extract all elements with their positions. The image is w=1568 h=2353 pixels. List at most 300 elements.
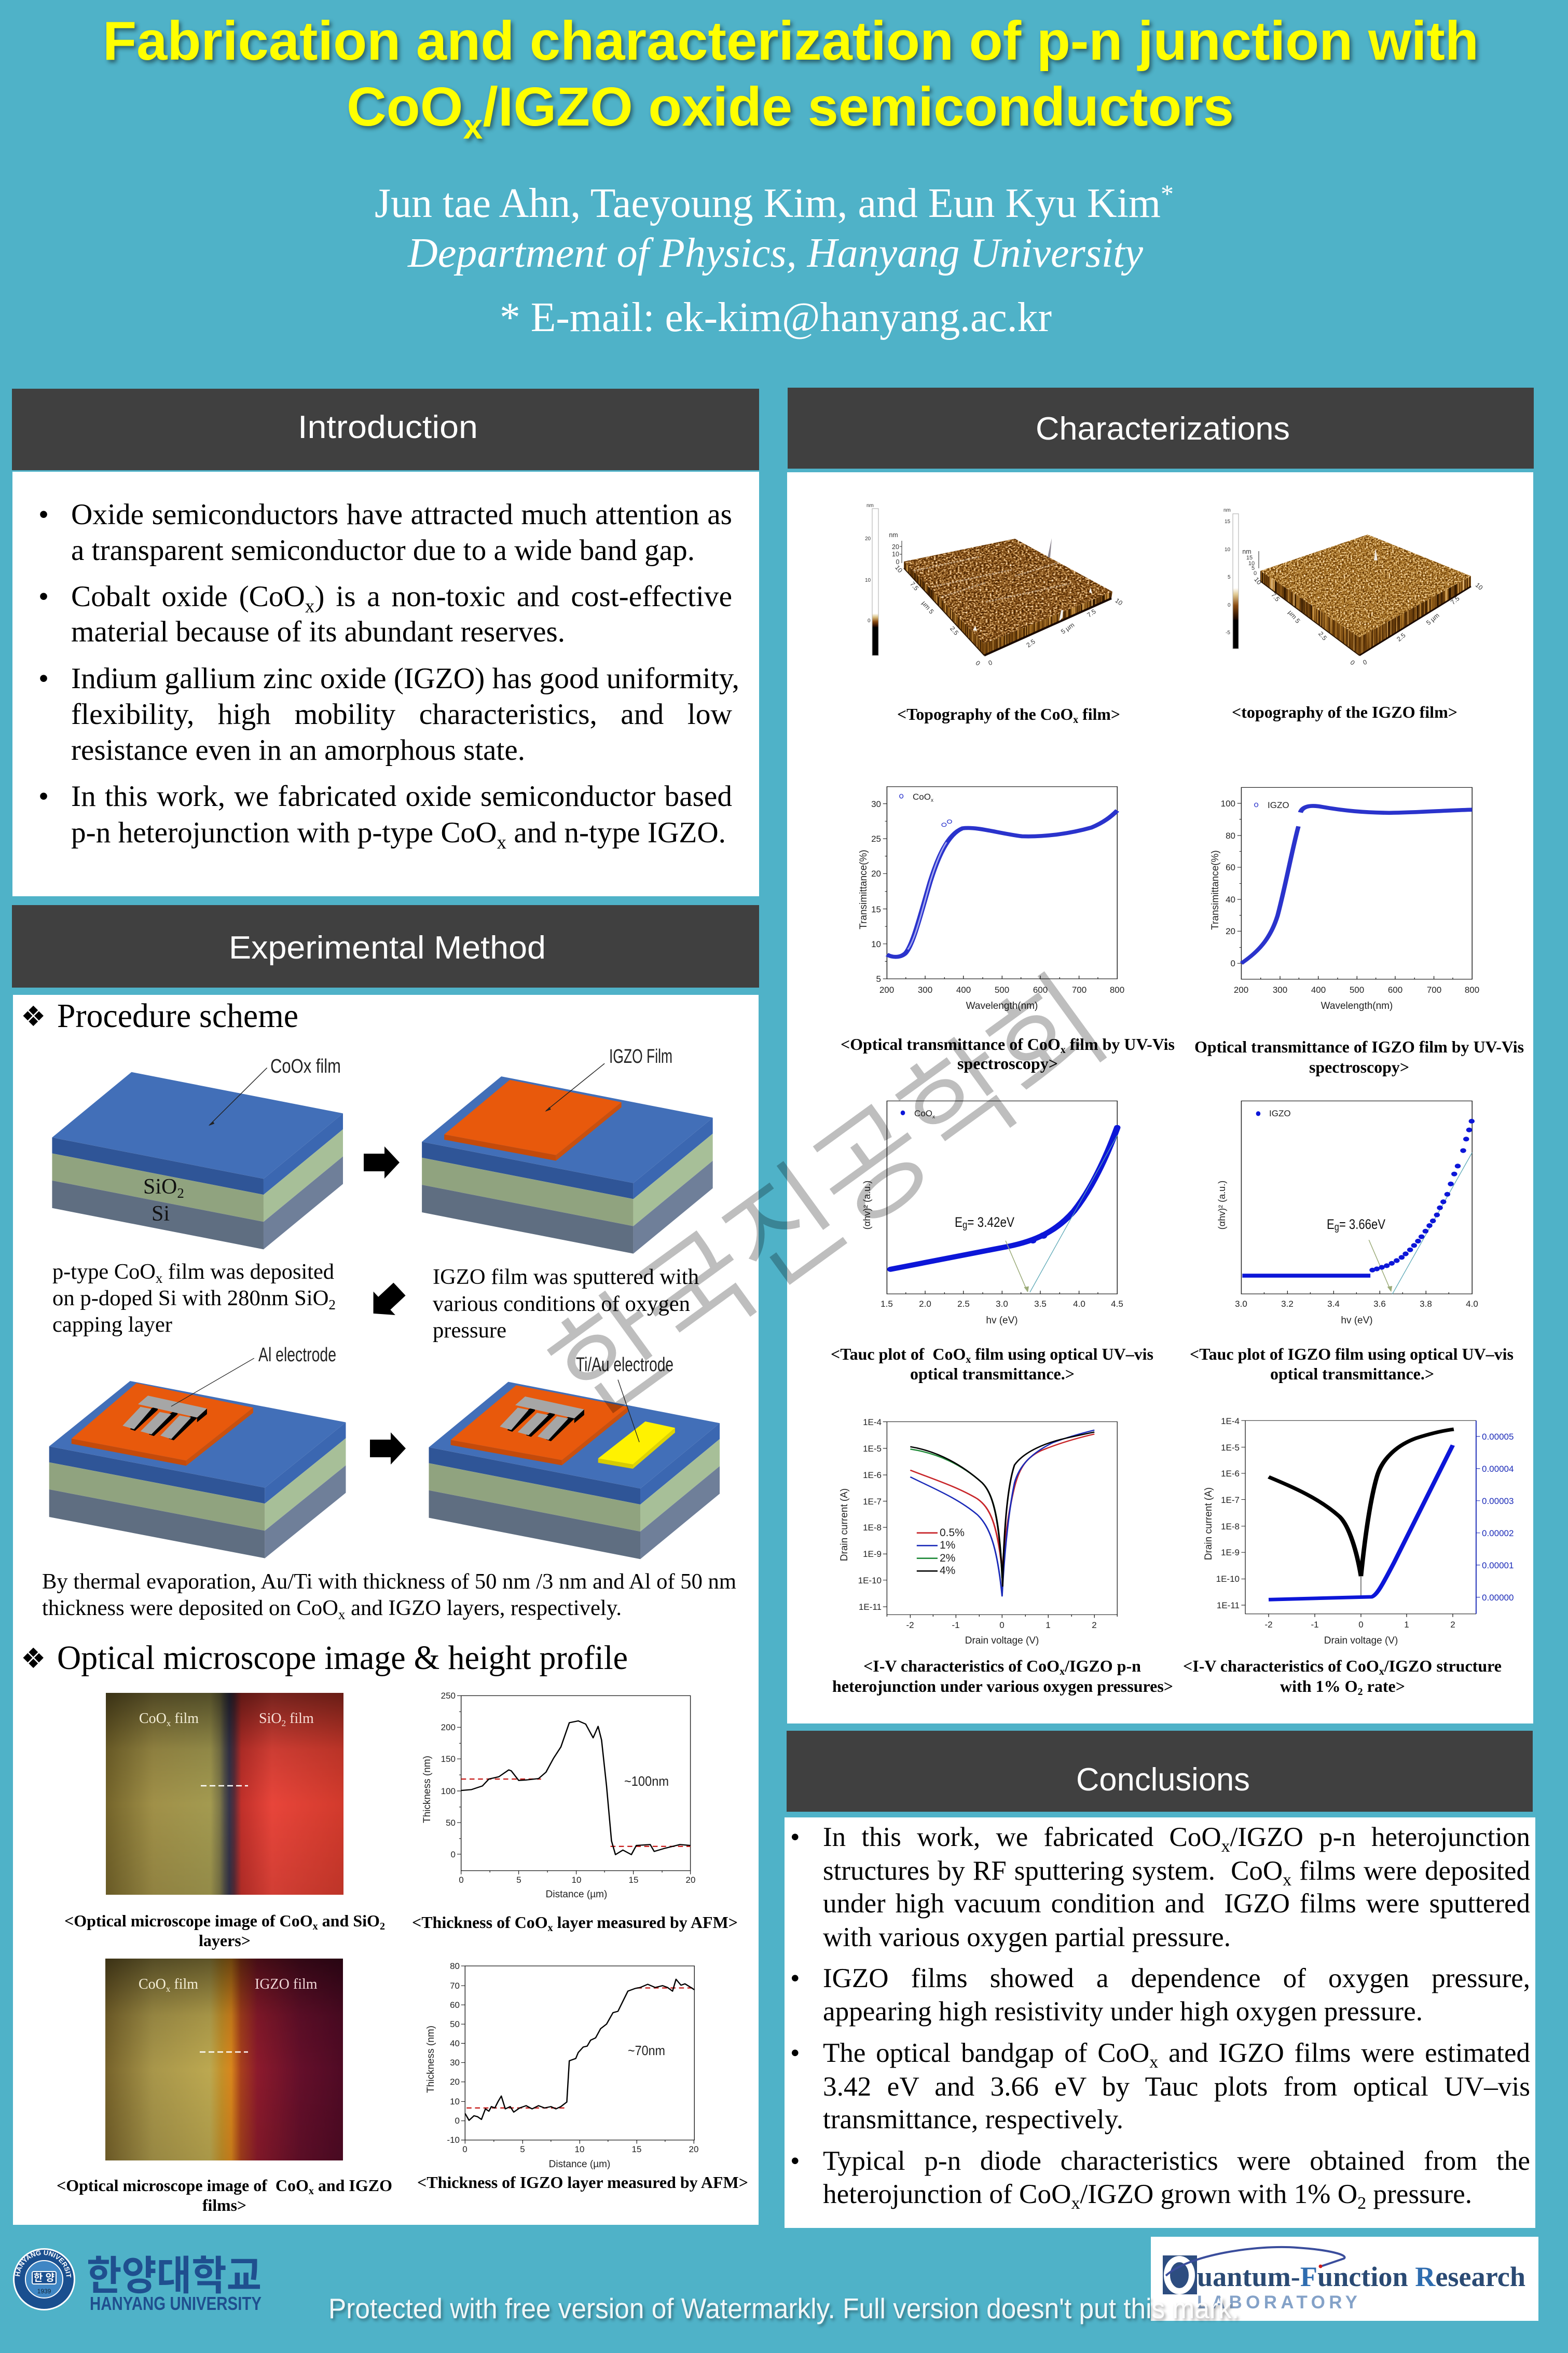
panel: conclusions: • — [790, 2038, 800, 2068]
image: IGZO AFM topography: -5 — [1226, 630, 1230, 636]
panel: introduction: p-n heterojunction with p-type CoO — [71, 816, 497, 849]
heading: procedure scheme: ❖ — [21, 1000, 46, 1033]
watermark: Watermarkly notice: Protected with free version of Watermarkly. Full version doesn't put this mark. — [328, 2292, 1239, 2324]
caption: CoOx deposition step: film was deposited — [162, 1260, 334, 1284]
panel: characterizations — [787, 388, 1534, 1723]
panel: conclusions: • — [790, 1963, 800, 1993]
panel: conclusions: transmittance, respectively. — [823, 2104, 1123, 2135]
panel: conclusions: 2 — [1357, 2194, 1366, 2213]
image: CoOx and IGZO microscope: film — [170, 1976, 198, 1992]
chart: CoOx thickness: 250 — [441, 1691, 456, 1701]
title: x — [463, 107, 483, 146]
image: IGZO AFM topography: 5 — [1228, 574, 1231, 580]
image: IGZO AFM topography: 7.5 — [1449, 595, 1461, 606]
panel: conclusions: x — [1221, 1837, 1230, 1856]
chart: I-V by oxygen pressure: 1E-6 — [863, 1470, 882, 1480]
image: CoOx and SiO2 microscope: film — [171, 1711, 199, 1727]
caption: microscope CoOx and SiO2: and SiO — [318, 1911, 380, 1930]
caption: topography CoOx: film> — [1078, 705, 1120, 723]
arrow: step 1 to step 2 — [364, 1146, 400, 1179]
chart: IGZO Tauc plot: IGZO — [1269, 1109, 1291, 1118]
panel: conclusions: films were deposited — [1291, 1856, 1530, 1886]
panel: conclusions: The optical bandgap of CoO — [823, 2038, 1150, 2068]
diagram: IGZO film device: IGZO Film — [609, 1046, 672, 1068]
caption: Tauc IGZO: <Tauc plot of IGZO film using optical UV–vis — [1190, 1345, 1514, 1363]
diagram: CoOx film device: 2 — [177, 1185, 184, 1201]
panel: introduction: a transparent semiconductor due to a wide band gap. — [71, 534, 695, 567]
chart: IGZO thickness: 15 — [632, 2144, 641, 2154]
chart: CoOx Tauc plot: 2.5 — [957, 1299, 970, 1309]
chart: CoOx transmittance: 500 — [995, 985, 1009, 995]
chart: CoOx thickness: 100 — [441, 1786, 456, 1796]
caption: transmittance CoOx: x — [1061, 1044, 1066, 1056]
image: CoOx and IGZO microscope: CoO — [139, 1976, 166, 1992]
image: CoOx and IGZO microscope — [105, 1959, 343, 2160]
panel: conclusions: /IGZO grown with 1% O — [1080, 2179, 1357, 2209]
chart: I-V at 1% O2: 2 — [1450, 1620, 1455, 1630]
caption: microscope CoOx and SiO2 — [64, 1911, 385, 1950]
caption: CoOx deposition step: capping layer — [52, 1312, 172, 1337]
chart: IGZO thickness: 20 — [450, 2077, 460, 2087]
diagram: IGZO film device — [422, 1046, 713, 1254]
chart: CoOx Tauc plot: 3.5 — [1034, 1299, 1047, 1309]
panel: conclusions: /IGZO p-n heterojunction — [1230, 1822, 1530, 1852]
chart: CoOx transmittance: 25 — [871, 834, 881, 844]
chart: IGZO thickness: 10 — [450, 2097, 460, 2106]
chart: I-V by oxygen pressure: 1E-10 — [858, 1576, 882, 1585]
panel: conclusions: under high vacuum condition and IGZO films were sputtered — [823, 1889, 1530, 1919]
chart: CoOx thickness: 15 — [629, 1875, 638, 1885]
image: CoOx AFM topography: 7.5 — [909, 580, 920, 592]
arrow: step 3 to step 4 — [370, 1432, 406, 1465]
chart: IGZO Tauc plot: 3.2 — [1281, 1299, 1294, 1309]
chart: IGZO thickness: 0 — [455, 2116, 460, 2126]
image: CoOx and SiO2 microscope: film — [286, 1711, 314, 1727]
caption: electrode evaporation: thickness were deposited on CoO — [42, 1596, 337, 1620]
chart: CoOx thickness — [422, 1691, 695, 1900]
diagram: Al electrode device: Al electrode — [258, 1344, 336, 1366]
logo: Quantum-Function Research Laboratory: uantum-Function Research — [1197, 2261, 1525, 2292]
diagram: CoOx film device: CoOx film — [270, 1056, 341, 1077]
chart: CoOx Tauc plot: hv (eV) — [986, 1315, 1018, 1326]
image: CoOx AFM topography — [865, 503, 1124, 667]
chart: I-V at 1% O2: 0.00001 — [1482, 1561, 1514, 1570]
image: CoOx and SiO2 microscope: x — [167, 1718, 171, 1728]
caption: microscope CoOx and IGZO — [57, 2176, 392, 2214]
image: CoOx AFM topography: 20 — [865, 536, 871, 542]
caption: electrode evaporation: and IGZO layers, respectively. — [345, 1596, 622, 1620]
chart: IGZO thickness: 50 — [450, 2019, 460, 2029]
caption: microscope CoOx and IGZO: and IGZO — [314, 2176, 392, 2195]
logo: Hanyang University — [13, 2248, 262, 2314]
panel: conclusions: x — [1149, 2053, 1158, 2072]
panel: introduction: Introduction — [298, 409, 478, 445]
image: IGZO AFM topography: 10 — [1253, 576, 1263, 586]
image: CoOx AFM topography: 5 µm — [1060, 621, 1076, 636]
heading: optical microscope: ❖ — [21, 1642, 46, 1675]
chart: CoOx Tauc plot: (αhv)² (a.u.) — [862, 1181, 872, 1229]
chart: CoOx transmittance: Transimittance(%) — [858, 850, 869, 929]
chart: IGZO Tauc plot — [1217, 1101, 1478, 1326]
chart: I-V at 1% O2: -2 — [1264, 1620, 1273, 1630]
panel: conclusions: Conclusions — [1076, 1762, 1250, 1798]
chart: IGZO transmittance: 300 — [1273, 985, 1287, 995]
panel: conclusions: Typical p-n diode characteristics were obtained from the — [823, 2146, 1530, 2176]
image: CoOx AFM topography: 20 — [892, 543, 899, 551]
chart: CoOx thickness: 200 — [441, 1722, 456, 1732]
chart: CoOx thickness: Distance (µm) — [546, 1889, 607, 1900]
image: IGZO AFM topography: 5 — [1251, 565, 1255, 571]
image: CoOx AFM topography: 2.5 — [948, 625, 960, 637]
caption: topography IGZO: <topography of the IGZO film> — [1232, 703, 1457, 721]
chart: CoOx thickness: ~100nm — [624, 1773, 669, 1789]
panel: introduction: • — [38, 780, 49, 813]
caption: transmittance IGZO — [1194, 1037, 1524, 1076]
authors and affiliation: Department of Physics, Hanyang University — [407, 230, 1143, 276]
diagram: Ti/Au electrode device: Ti/Au electrode — [576, 1354, 673, 1376]
caption: Tauc CoOx — [831, 1345, 1153, 1383]
caption: I-V 1% O2: with 1% O — [1280, 1677, 1357, 1695]
chart: IGZO transmittance: 400 — [1311, 985, 1326, 995]
caption: I-V 1% O2: <I-V characteristics of CoO — [1183, 1657, 1379, 1675]
chart: I-V at 1% O2: 1E-4 — [1221, 1416, 1240, 1426]
image: CoOx and SiO2 microscope: SiO — [259, 1711, 282, 1727]
panel: experimental method: Experimental Method — [229, 930, 546, 966]
panel: introduction: • — [38, 662, 49, 695]
image: IGZO AFM topography: 0 — [1228, 603, 1231, 608]
chart: IGZO Tauc plot: hv (eV) — [1341, 1315, 1373, 1326]
chart: CoOx Tauc plot: = 3.42eV — [967, 1214, 1014, 1230]
caption: microscope CoOx and SiO2: <Optical microscope image of CoO — [64, 1911, 312, 1930]
caption: thickness of IGZO: <Thickness of IGZO layer measured by AFM> — [417, 2173, 748, 2192]
caption: I-V pressures: x — [1060, 1666, 1065, 1677]
chart: IGZO thickness: 0 — [462, 2144, 467, 2154]
caption: topography CoOx: <Topography of the CoO — [897, 705, 1075, 723]
panel: conclusions: with various oxygen partial pressure. — [823, 1922, 1231, 1952]
panel: conclusions: structures by RF sputtering system. CoO — [823, 1856, 1283, 1886]
panel: conclusions: • — [790, 2146, 800, 2176]
diagram: Al electrode device — [49, 1344, 346, 1558]
chart: I-V by oxygen pressure: -2 — [906, 1620, 914, 1630]
chart: IGZO thickness: Thickness (nm) — [425, 2026, 436, 2093]
caption: transmittance IGZO: spectroscopy> — [1309, 1058, 1409, 1076]
caption: electrode evaporation: x — [338, 1607, 346, 1622]
image: CoOx and SiO2 microscope: 2 — [282, 1718, 286, 1728]
panel: characterizations: Characterizations — [1036, 411, 1290, 447]
panel: introduction: x — [305, 596, 315, 617]
chart: I-V at 1% O2: 0.00000 — [1482, 1593, 1514, 1603]
chart: CoOx transmittance: 5 — [876, 974, 881, 984]
caption: electrode evaporation: By thermal evaporation, Au/Ti with thickness of 50 nm /3 nm and Al of 50 nm — [42, 1569, 736, 1594]
chart: IGZO thickness: 30 — [450, 2058, 460, 2068]
chart: I-V by oxygen pressure: 0.5% — [940, 1527, 965, 1539]
chart: IGZO transmittance: 800 — [1465, 985, 1479, 995]
image: IGZO AFM topography: 15 — [1225, 519, 1231, 525]
chart: IGZO transmittance: 500 — [1350, 985, 1364, 995]
caption: topography CoOx: x — [1073, 714, 1078, 726]
chart: IGZO transmittance: 100 — [1221, 799, 1235, 809]
panel: conclusions: IGZO films showed a dependence of oxygen pressure, — [823, 1963, 1530, 1993]
image: CoOx AFM topography: 0 — [987, 659, 993, 667]
chart: IGZO Tauc plot: 4.0 — [1466, 1299, 1478, 1309]
panel: introduction: material because of its abundant reserves. — [71, 615, 565, 648]
chart: CoOx transmittance: Wavelength(nm) — [966, 1001, 1038, 1011]
panel: conclusions: and IGZO films were estimated — [1158, 2038, 1530, 2068]
chart: IGZO Tauc plot: 3.0 — [1235, 1299, 1247, 1309]
panel: introduction: flexibility, high mobility characteristics, and low — [71, 698, 733, 731]
diagram: CoOx film device: Si — [152, 1202, 170, 1226]
panel: introduction: x — [497, 832, 507, 853]
caption: microscope CoOx and IGZO: films> — [202, 2196, 246, 2214]
image: IGZO AFM topography: 10 — [1474, 581, 1484, 592]
chart: IGZO thickness: ~70nm — [628, 2043, 665, 2058]
image: CoOx AFM topography: 10 — [893, 564, 904, 574]
chart: IGZO thickness: 10 — [575, 2144, 584, 2154]
chart: I-V by oxygen pressure: 0 — [999, 1620, 1005, 1630]
title: /IGZO oxide semiconductors — [483, 76, 1234, 138]
caption: Tauc IGZO — [1190, 1345, 1514, 1383]
caption: microscope CoOx and SiO2: layers> — [199, 1931, 251, 1950]
image: CoOx and SiO2 microscope — [106, 1693, 343, 1895]
chart: CoOx thickness: 20 — [686, 1875, 695, 1885]
caption: CoOx deposition step: on p-doped Si with 280nm SiO — [52, 1286, 327, 1310]
panel: introduction: Cobalt oxide (CoO — [71, 580, 305, 613]
caption: I-V 1% O2: rate> — [1363, 1677, 1405, 1695]
panel: introduction: resistance even in an amorphous state. — [71, 734, 525, 767]
chart: CoOx transmittance: 700 — [1072, 985, 1086, 995]
caption: I-V 1% O2: 2 — [1358, 1686, 1363, 1698]
chart: CoOx thickness: 150 — [441, 1754, 456, 1764]
image: CoOx and SiO2 microscope: CoO — [139, 1711, 167, 1727]
panel: introduction: • — [38, 580, 49, 613]
chart: CoOx Tauc plot — [862, 1101, 1123, 1326]
image: CoOx AFM topography: 10 — [865, 578, 871, 583]
panel: introduction: In this work, we fabricated oxide semiconductor based — [71, 780, 732, 813]
panel: conclusions: In this work, we fabricated CoO — [823, 1822, 1221, 1852]
chart: CoOx transmittance — [858, 787, 1124, 1011]
chart: IGZO thickness: 40 — [450, 2039, 460, 2048]
chart: IGZO Tauc plot: 3.6 — [1373, 1299, 1386, 1309]
chart: CoOx Tauc plot: E — [955, 1214, 964, 1230]
panel: introduction: Oxide semiconductors have attracted much attention as — [71, 498, 732, 531]
image: CoOx AFM topography: 2.5 — [1025, 638, 1037, 649]
logo: Hanyang University: 1939 — [37, 2288, 51, 2295]
panel: conclusions: appearing high resistivity under high oxygen pressure. — [823, 1996, 1423, 2027]
panel: introduction — [12, 389, 759, 896]
chart: I-V by oxygen pressure: -1 — [952, 1620, 960, 1630]
chart: IGZO transmittance: 0 — [1231, 959, 1235, 968]
caption: transmittance CoOx: film by UV-Vis — [1066, 1035, 1175, 1054]
panel: introduction: ) is a non-toxic and cost-effective — [314, 580, 732, 613]
chart: CoOx thickness: 0 — [459, 1875, 464, 1885]
caption: transmittance IGZO: Optical transmittance of IGZO film by UV-Vis — [1194, 1037, 1524, 1056]
chart: CoOx Tauc plot: 1.5 — [881, 1299, 893, 1309]
logo: Quantum-Function Research Laboratory: LABORATORY — [1197, 2292, 1357, 2313]
chart: CoOx transmittance: 200 — [879, 985, 894, 995]
caption: IGZO sputter step: IGZO film was sputtered with — [433, 1265, 699, 1289]
watermark: Korean society name: 한국진공학회 — [529, 954, 1130, 1441]
chart: CoOx transmittance: 20 — [871, 869, 881, 879]
chart: IGZO transmittance: 600 — [1388, 985, 1402, 995]
chart: IGZO thickness: -10 — [447, 2135, 460, 2145]
chart: IGZO transmittance: 700 — [1427, 985, 1441, 995]
chart: CoOx Tauc plot: 3.0 — [996, 1299, 1008, 1309]
logo: Hanyang University: 한 양 — [34, 2272, 54, 2283]
image: IGZO AFM topography: 2.5 — [1395, 632, 1407, 643]
chart: IGZO thickness: 5 — [520, 2144, 525, 2154]
image: IGZO AFM topography: nm — [1223, 508, 1231, 513]
chart: CoOx transmittance: 10 — [871, 939, 881, 949]
caption: IGZO sputter step: various conditions of oxygen — [433, 1292, 690, 1316]
arrow: step 2 to step 3 — [362, 1277, 410, 1325]
caption: microscope CoOx and SiO2: x — [313, 1921, 318, 1932]
chart: I-V by oxygen pressure: 1E-7 — [863, 1497, 882, 1507]
diagram: Ti/Au electrode device — [429, 1354, 720, 1559]
chart: I-V at 1% O2: 1E-11 — [1217, 1600, 1240, 1610]
chart: CoOx transmittance: 300 — [918, 985, 932, 995]
caption: Tauc CoOx: optical transmittance.> — [910, 1364, 1075, 1383]
image: IGZO AFM topography: 5 µm — [1425, 612, 1441, 626]
chart: IGZO thickness: 70 — [450, 1981, 460, 1991]
panel: conclusions: heterojunction of CoO — [823, 2179, 1070, 2209]
chart: I-V by oxygen pressure: Drain current (A) — [839, 1488, 850, 1561]
chart: CoOx transmittance: CoO — [913, 792, 931, 802]
caption: microscope CoOx and IGZO: <Optical microscope image of CoO — [57, 2176, 309, 2195]
chart: IGZO Tauc plot: = 3.66eV — [1339, 1216, 1385, 1232]
panel: introduction: • — [38, 498, 49, 531]
caption: CoOx deposition step: p-type CoO — [52, 1260, 156, 1284]
chart: I-V by oxygen pressure: 4% — [940, 1565, 955, 1577]
chart: IGZO thickness: Distance (µm) — [549, 2159, 610, 2170]
image: IGZO AFM topography: 7.5 — [1270, 591, 1281, 603]
chart: CoOx Tauc plot: 2.0 — [919, 1299, 931, 1309]
chart: CoOx Tauc plot: g — [962, 1220, 967, 1231]
chart: CoOx Tauc plot: 4.5 — [1111, 1299, 1123, 1309]
chart: IGZO transmittance: 40 — [1226, 895, 1235, 905]
chart: I-V at 1% O2: Drain voltage (V) — [1324, 1635, 1398, 1646]
chart: IGZO transmittance: 20 — [1226, 926, 1235, 936]
caption: microscope CoOx and SiO2: 2 — [380, 1921, 385, 1932]
chart: CoOx transmittance: 15 — [871, 905, 881, 914]
image: IGZO AFM topography: 0 — [1254, 570, 1257, 577]
image: CoOx AFM topography: 0 — [974, 659, 982, 667]
panel: experimental method — [12, 905, 759, 2225]
chart: I-V by oxygen pressure: 2 — [1092, 1620, 1097, 1630]
chart: I-V at 1% O2 — [1203, 1416, 1514, 1646]
caption: Tauc IGZO: optical transmittance.> — [1270, 1364, 1434, 1383]
image: CoOx AFM topography: nm — [866, 503, 874, 509]
caption: I-V pressures: /IGZO p-n — [1064, 1657, 1141, 1675]
chart: I-V at 1% O2: 1E-9 — [1221, 1548, 1240, 1557]
chart: I-V by oxygen pressure: 1E-8 — [863, 1523, 882, 1533]
authors and affiliation: * E-mail: ek-kim@hanyang.ac.kr — [500, 295, 1052, 340]
image: IGZO AFM topography: nm — [1242, 548, 1251, 555]
caption: transmittance CoOx: spectroscopy> — [957, 1054, 1058, 1073]
chart: CoOx thickness: 10 — [572, 1875, 581, 1885]
image: CoOx AFM topography: nm — [889, 531, 898, 539]
caption: IGZO sputter step: pressure — [433, 1318, 506, 1343]
chart: CoOx transmittance: 600 — [1033, 985, 1048, 995]
image: IGZO AFM topography: 10 — [1225, 547, 1231, 553]
image: IGZO AFM topography: 0 — [1349, 659, 1356, 667]
chart: CoOx transmittance: 400 — [956, 985, 971, 995]
logo: Hanyang University: 한양대학교 — [87, 2253, 262, 2299]
chart: CoOx Tauc plot: x — [932, 1114, 935, 1120]
panel: conclusions: x — [1071, 2194, 1080, 2213]
title — [103, 10, 1479, 146]
chart: IGZO transmittance: 200 — [1234, 985, 1248, 995]
caption: IGZO sputter step — [433, 1265, 699, 1343]
chart: IGZO transmittance: 60 — [1226, 863, 1235, 872]
authors and affiliation: * — [1161, 179, 1174, 208]
caption: microscope CoOx and IGZO: x — [309, 2185, 314, 2197]
chart: IGZO thickness: 80 — [450, 1961, 460, 1971]
image: CoOx AFM topography: 7.5 — [1086, 608, 1097, 619]
chart: I-V at 1% O2: 1E-8 — [1221, 1522, 1240, 1531]
chart: IGZO Tauc plot: g — [1335, 1222, 1339, 1233]
image: CoOx and IGZO microscope: x — [166, 1984, 171, 1994]
caption: CoOx deposition step — [52, 1260, 336, 1337]
caption: Tauc CoOx: <Tauc plot of CoO — [831, 1345, 966, 1363]
caption: Tauc CoOx: x — [966, 1354, 971, 1365]
caption: thickness of CoOx: layer measured by AFM> — [553, 1913, 738, 1932]
chart: I-V at 1% O2: 0 — [1358, 1620, 1364, 1630]
chart: IGZO transmittance: IGZO — [1268, 800, 1289, 810]
authors and affiliation — [375, 179, 1174, 340]
chart: CoOx Tauc plot: 4.0 — [1073, 1299, 1085, 1309]
chart: CoOx thickness: Thickness (nm) — [422, 1756, 433, 1823]
caption: I-V 1% O2: /IGZO structure — [1384, 1657, 1502, 1675]
title: CoO — [347, 76, 463, 138]
chart: I-V by oxygen pressure: 1 — [1046, 1620, 1051, 1630]
chart: I-V by oxygen pressure: 1E-11 — [859, 1602, 882, 1612]
chart: CoOx transmittance: 800 — [1110, 985, 1124, 995]
chart: CoOx Tauc plot: CoO — [914, 1109, 932, 1118]
panel: conclusions: • — [790, 1822, 800, 1852]
caption: transmittance CoOx — [841, 1035, 1175, 1073]
chart: IGZO thickness: 20 — [689, 2144, 698, 2154]
chart: I-V by oxygen pressure: 1% — [940, 1539, 955, 1551]
caption: I-V 1% O2: x — [1379, 1666, 1384, 1677]
chart: IGZO Tauc plot: (αhv)² (a.u.) — [1217, 1181, 1227, 1229]
panel: conclusions: 3.42 eV and 3.66 eV by Tauc plots from optical UV–vis — [823, 2072, 1530, 2102]
logo: Quantum-Function Research Laboratory — [1151, 2237, 1538, 2321]
chart: IGZO thickness — [425, 1961, 698, 2170]
chart: IGZO transmittance: Wavelength(nm) — [1321, 1001, 1393, 1011]
chart: IGZO transmittance: 80 — [1226, 831, 1235, 841]
caption: thickness of CoOx: x — [548, 1922, 553, 1934]
heading: optical microscope: Optical microscope image & height profile — [57, 1639, 628, 1677]
caption: I-V 1% O2 — [1183, 1657, 1502, 1698]
image: IGZO AFM topography: µm 5 — [1287, 609, 1301, 625]
panel: conclusions: pressure. — [1366, 2179, 1472, 2209]
image: IGZO AFM topography: 0 — [1362, 658, 1368, 666]
image: CoOx AFM topography: 0 — [868, 618, 871, 624]
chart: I-V at 1% O2: 1E-6 — [1221, 1469, 1240, 1479]
heading: procedure scheme: Procedure scheme — [57, 997, 298, 1035]
chart: CoOx transmittance: x — [931, 798, 933, 803]
caption: CoOx deposition step: 2 — [328, 1297, 336, 1312]
panel: conclusions — [785, 1731, 1535, 2228]
chart: CoOx thickness: 5 — [516, 1875, 521, 1885]
caption: transmittance CoOx: <Optical transmittance of CoO — [841, 1035, 1061, 1054]
chart: I-V at 1% O2: -1 — [1311, 1620, 1319, 1630]
caption: thickness of CoOx: <Thickness of CoO — [412, 1913, 548, 1932]
chart: CoOx transmittance: 30 — [871, 799, 881, 809]
caption: I-V pressures — [832, 1657, 1173, 1695]
image: CoOx AFM topography: 0 — [896, 558, 900, 566]
chart: IGZO transmittance — [1210, 787, 1479, 1011]
